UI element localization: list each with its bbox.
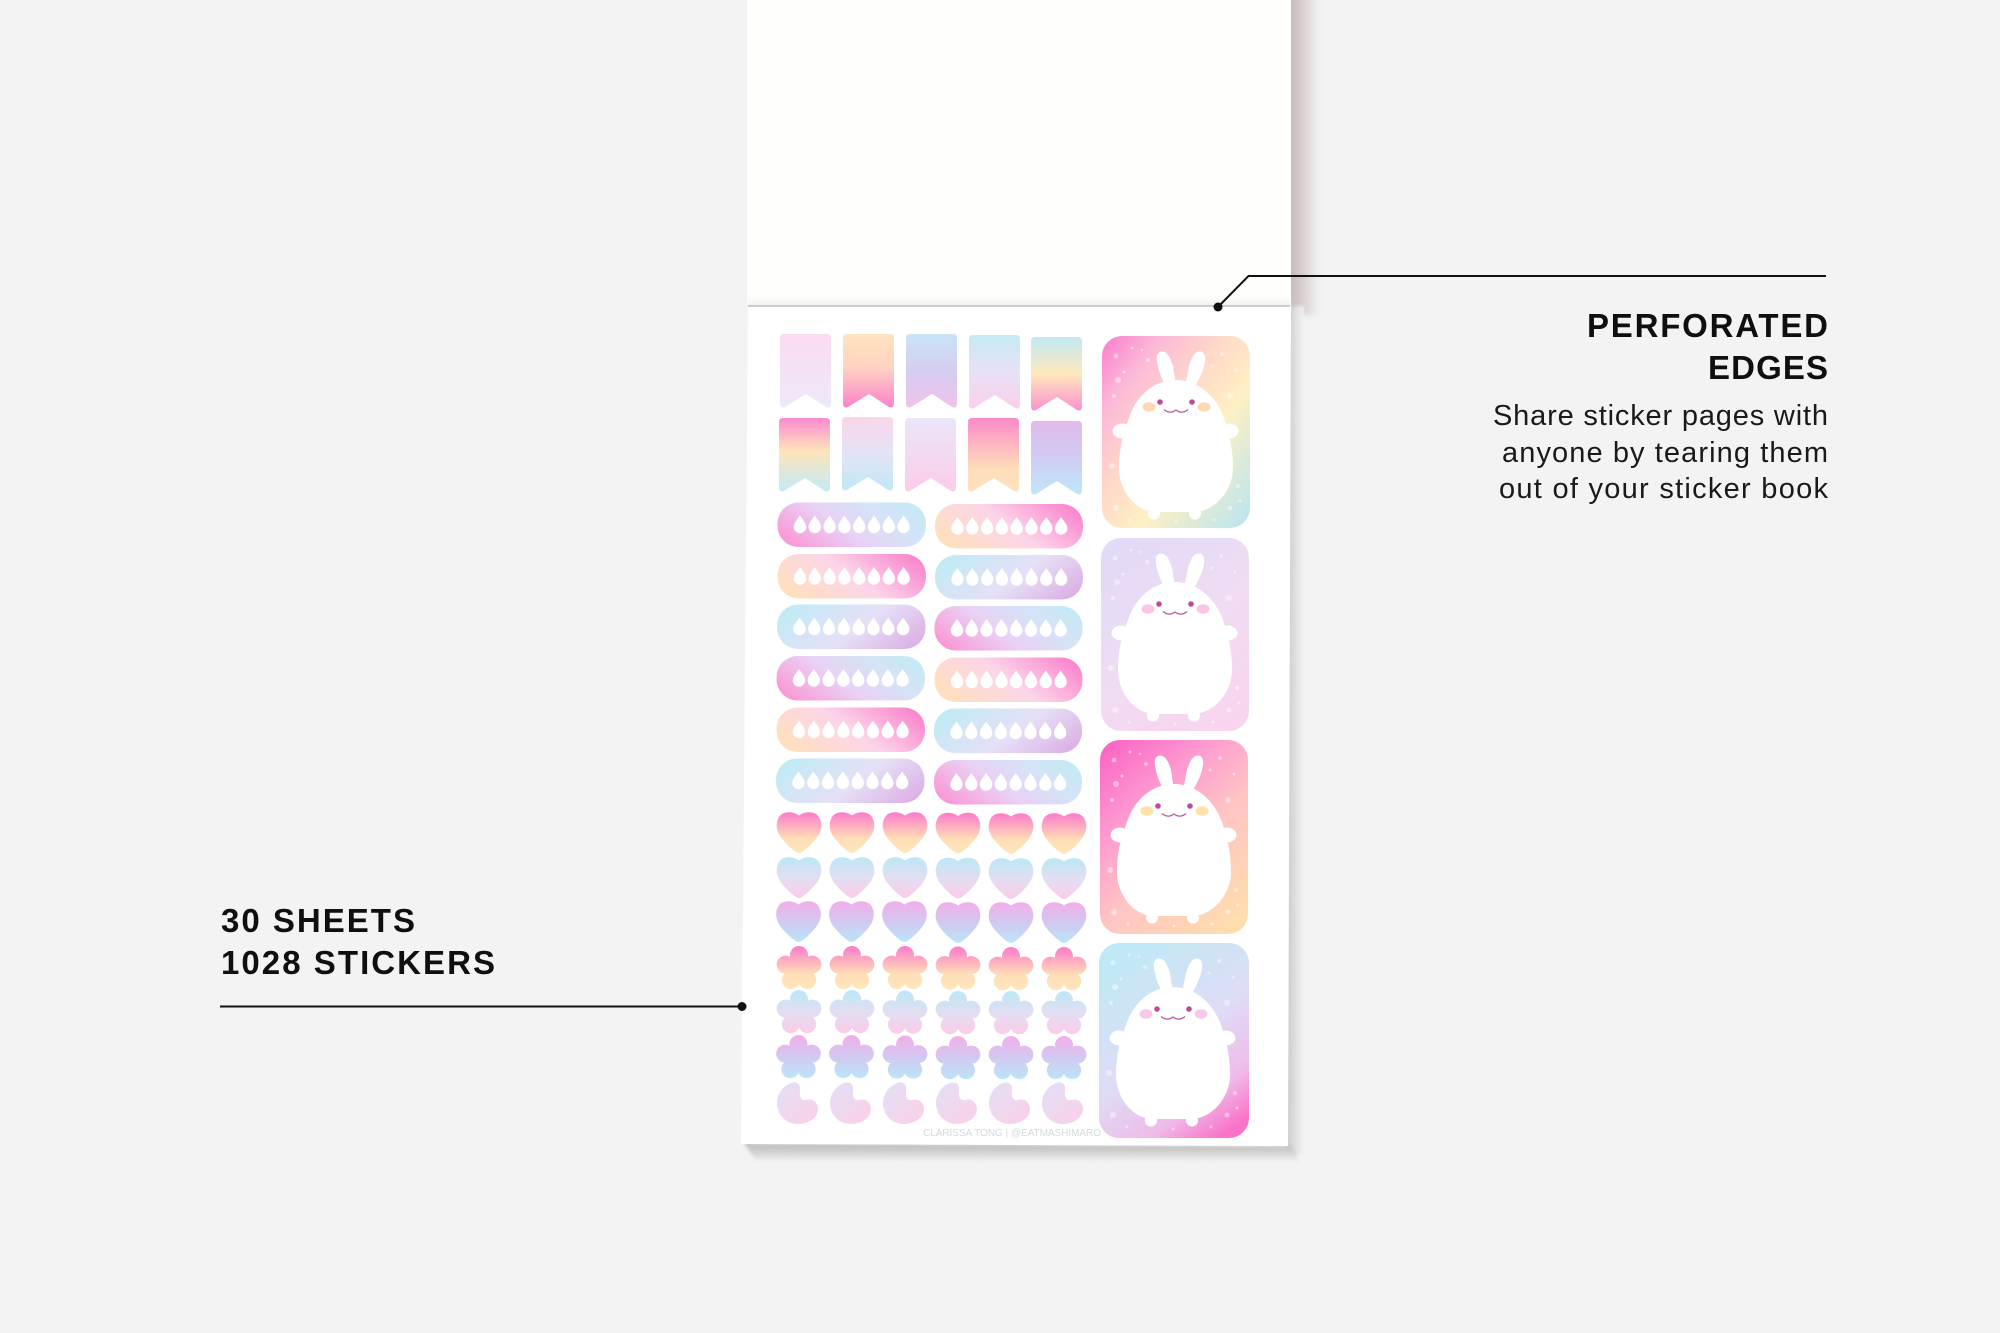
shadow: right side of top sheet (1284, 0, 1320, 315)
callout heading: PERFORATED (1587, 307, 1828, 344)
bunny card: pink to peach (1100, 740, 1248, 934)
flag stickers (779, 334, 1082, 494)
leader line (1214, 276, 1826, 312)
pills right column (934, 504, 1083, 804)
perforation line (748, 292, 1290, 307)
shadow: right side of sticker sheet (1286, 306, 1304, 1154)
callout body: out of your sticker book (1499, 473, 1828, 505)
pills left column (776, 502, 926, 803)
artist credit: CLARISSA TONG | @EATMASHIMARO (923, 1128, 1101, 1139)
flag row two (779, 417, 1082, 494)
callout body: Share sticker pages with (1493, 400, 1828, 432)
flag row one (780, 334, 1082, 410)
count heading: 30 SHEETS (221, 902, 415, 939)
torn top sheet (747, 0, 1291, 306)
callout body: anyone by tearing them (1502, 437, 1828, 469)
callout body (1493, 400, 1828, 505)
bunny card: blue to pink (1099, 943, 1249, 1138)
bunny card: pink to blue (1102, 336, 1250, 528)
flower star stickers (776, 946, 1086, 1079)
callout heading (1587, 307, 1828, 386)
sticker book (741, 0, 1320, 1162)
count heading (221, 902, 495, 981)
heart stickers (776, 812, 1086, 943)
sticker sheet (741, 304, 1291, 1146)
callout: perforated edges (1214, 276, 1828, 505)
bunny card: lavender (1101, 538, 1249, 731)
callout heading: EDGES (1708, 349, 1828, 386)
leader line (220, 1002, 746, 1011)
callout: sheet and sticker count (220, 902, 746, 1011)
water drop tracker pills (776, 502, 1083, 804)
shadow: bottom edge of book (744, 1143, 1300, 1162)
crescent moon stickers (777, 1082, 1083, 1124)
count heading: 1028 STICKERS (221, 944, 495, 981)
